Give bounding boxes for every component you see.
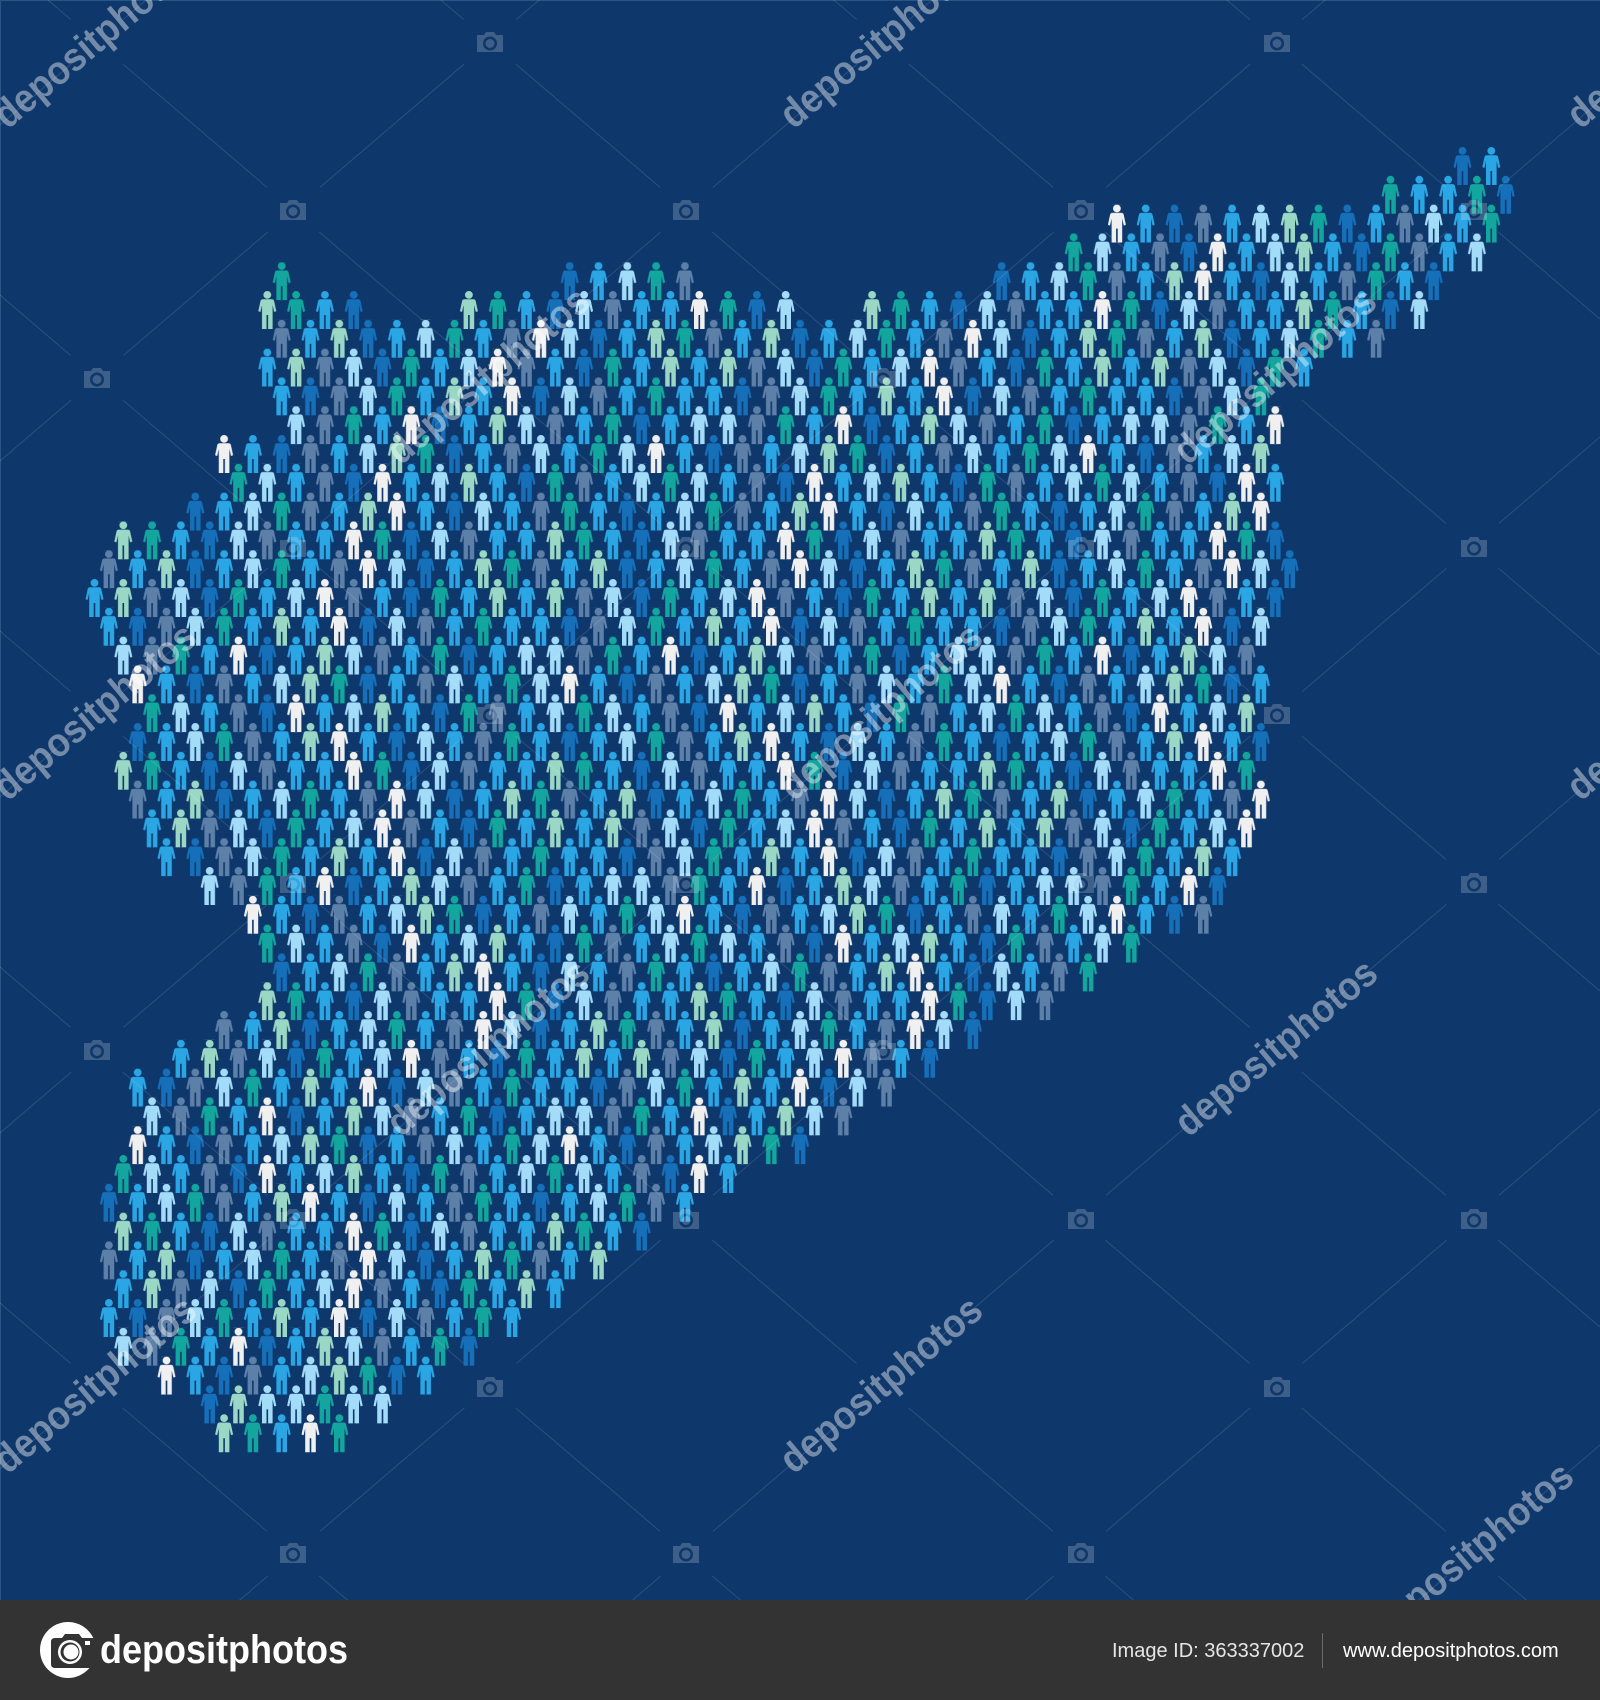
watermark camera icons xyxy=(84,32,1487,1563)
diagonal watermark text: depositphotos xyxy=(1165,279,1385,473)
map: Syria drawn from rows of people icons xyxy=(80,147,1515,1452)
diagonal watermark text: depositphotos xyxy=(771,1288,991,1482)
north-east tail of the map xyxy=(1059,147,1515,271)
northern border rows xyxy=(253,262,1448,444)
central body rows xyxy=(80,435,1304,1020)
website url: www.depositphotos.com xyxy=(1342,1640,1559,1662)
diagonal watermark text: depositphotos xyxy=(378,951,598,1145)
diagonal watermark text: depositphotos xyxy=(771,615,991,809)
footer bar xyxy=(0,1600,1600,1700)
diagonal watermark text: depositphotos xyxy=(378,279,598,473)
diagonal watermark text: depositphotos xyxy=(1166,951,1386,1145)
south-west rows xyxy=(94,1011,987,1452)
image id: Image ID: 363337002 xyxy=(1112,1640,1304,1662)
logo wordmark: depositphotos xyxy=(100,1628,348,1672)
icon: depositphotos camera logo xyxy=(40,1622,96,1678)
diagonal watermark text: depositphotos xyxy=(1362,1454,1582,1648)
